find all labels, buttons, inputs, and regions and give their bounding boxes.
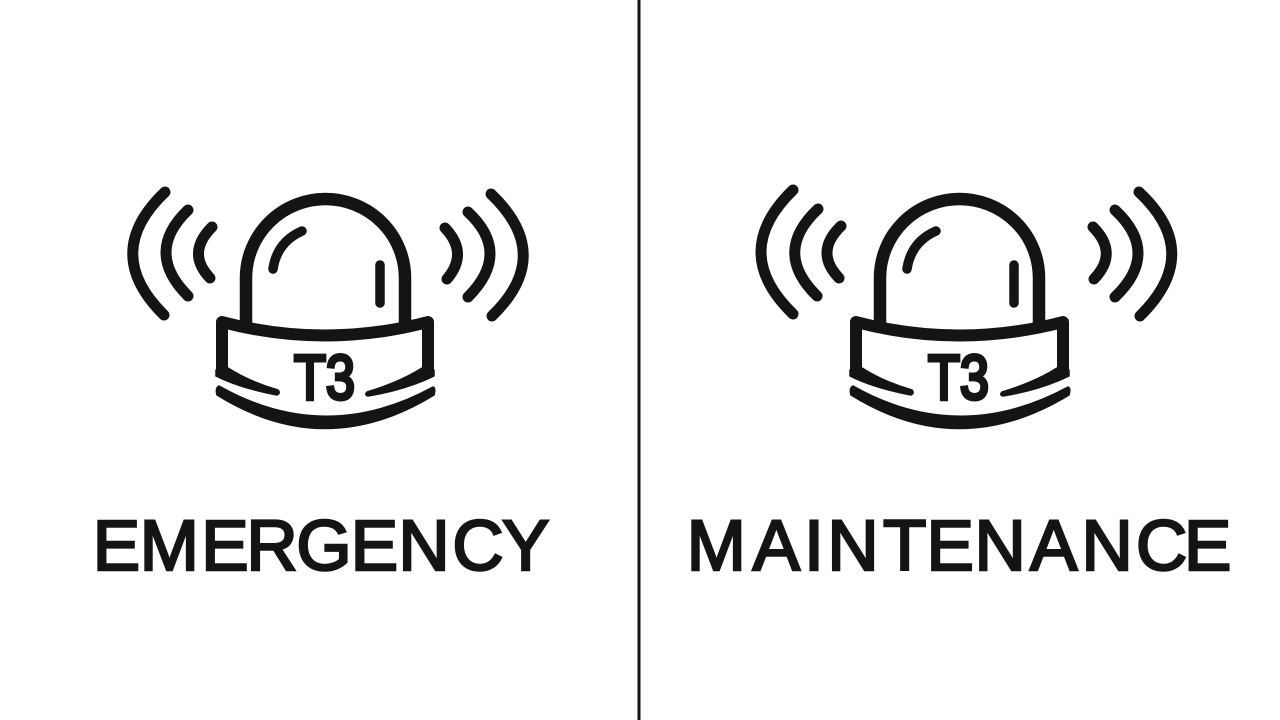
icon: left sound waves bbox=[133, 192, 212, 315]
heading: EMERGENCY: EMERGENCY bbox=[93, 507, 549, 586]
text: T3 badge: T3 bbox=[294, 343, 355, 413]
icon: right sound waves bbox=[1093, 192, 1172, 316]
panel: emergency bbox=[93, 192, 549, 586]
icon: beacon base band bbox=[216, 322, 435, 428]
icon: beacon base band bbox=[850, 322, 1070, 428]
icon: left sound waves bbox=[761, 190, 841, 314]
icon: maintenance alarm beacon bbox=[761, 190, 1172, 428]
heading: MAINTENANCE: MAINTENANCE bbox=[687, 507, 1231, 586]
icon: beacon dome bbox=[246, 199, 405, 323]
text: T3 badge: T3 bbox=[928, 343, 989, 413]
panel: maintenance bbox=[687, 190, 1231, 586]
icon: beacon dome bbox=[880, 199, 1039, 323]
icon: emergency alarm beacon bbox=[133, 192, 523, 428]
icon: right sound waves bbox=[445, 194, 523, 316]
